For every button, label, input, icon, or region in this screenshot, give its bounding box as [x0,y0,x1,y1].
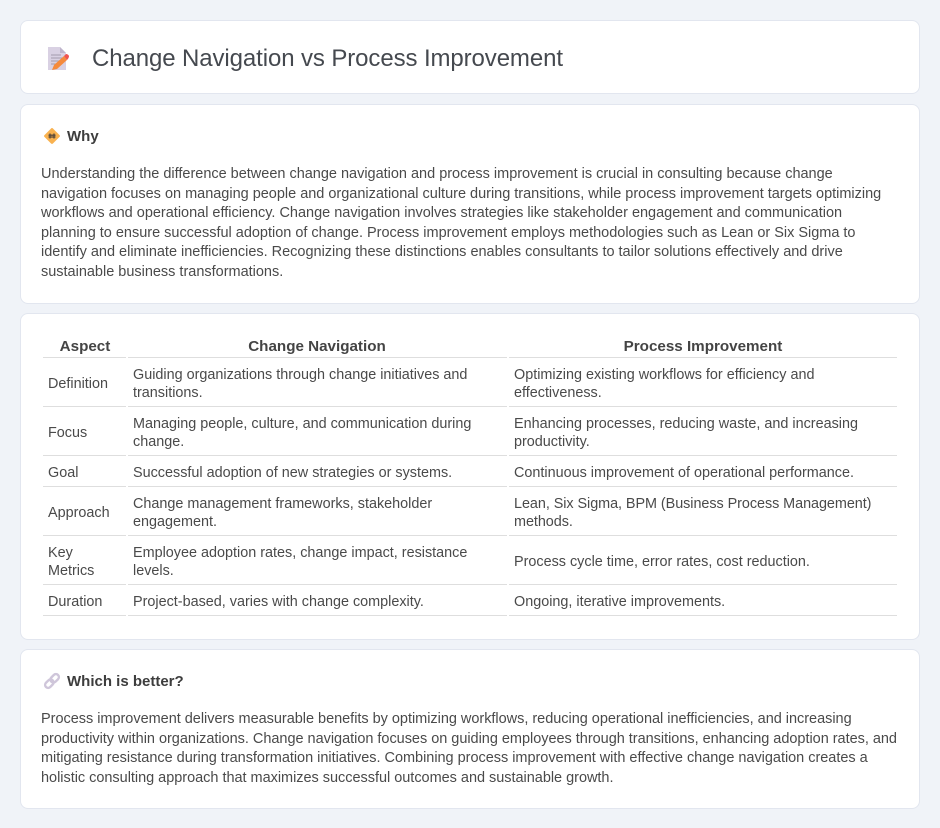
comparison table: Successful adoption of new strategies or systems. [133,465,452,481]
row: key metrics: Metrics [48,563,94,579]
row: approach: Approach [48,505,110,521]
text block: why: identify and eliminate inefficiencies. Recognizing these distinctions enables consultants to tailor solutions effectively and drive [41,244,843,260]
column header: change navigation: Change Navigation [248,338,386,355]
text block: why: workflows and operational efficiency. Change navigation involves strategies like stakeholder engagement and communication [41,205,842,221]
icon: warning diamond [44,128,60,144]
text block: which is better: Process improvement delivers measurable benefits by optimizing workflows, reducing operational inefficiencies, and increasing [41,711,852,727]
text block: why: navigation focuses on managing people and organizational culture during transitions, while process improvement targets optimizing [41,186,881,202]
row: focus: Focus [48,425,87,441]
row: duration: Duration [48,594,102,610]
comparison table: effectiveness. [514,385,602,401]
comparison table: transitions. [133,385,203,401]
comparison table: Managing people, culture, and communication during [133,416,471,432]
comparison table: Process cycle time, error rates, cost reduction. [514,554,810,570]
comparison table: levels. [133,563,174,579]
row: definition: Definition [48,376,108,392]
icon: chain link [44,672,60,690]
comparison table: engagement. [133,514,217,530]
text block: why: planning to ensure successful adoption of change. Process improvement employs methodologies such as Lean or Six Sigma to [41,225,855,241]
comparison table: Guiding organizations through change initiatives and [133,367,467,383]
heading: why: Why [67,128,99,145]
text block: why [41,166,881,280]
text block: which is better: mitigating resistance during transformation initiatives. Combining process improvement with effective change navigation creates a [41,750,868,766]
comparison table: Employee adoption rates, change impact, resistance [133,545,467,561]
comparison table: Ongoing, iterative improvements. [514,594,725,610]
text block: which is better [41,711,897,786]
comparison table: Project-based, varies with change complexity. [133,594,424,610]
comparison table: Change management frameworks, stakeholder [133,496,432,512]
comparison table [43,338,897,616]
comparison table: Continuous improvement of operational performance. [514,465,854,481]
comparison table: methods. [514,514,573,530]
comparison table: productivity. [514,434,590,450]
comparison table: Lean, Six Sigma, BPM (Business Process Management) [514,496,871,512]
icon: document with pencil [48,47,69,70]
text block: why: Understanding the difference between change navigation and process improvement is crucial in consulting because change [41,166,833,182]
comparison table: Enhancing processes, reducing waste, and increasing [514,416,858,432]
heading: which is better: Which is better? [67,673,184,690]
title: Change Navigation vs Process Improvement [92,45,563,72]
panel: which is better card [20,649,920,809]
comparison table: Optimizing existing workflows for efficiency and [514,367,814,383]
column header: process improvement: Process Improvement [624,338,782,355]
panel: comparison table card [20,313,920,640]
text block: why: sustainable business transformations. [41,264,283,280]
panel: why card [20,104,920,304]
row: key metrics [48,545,94,579]
text block: which is better: productivity within organizations. Change navigation focuses on guiding employees through transitions, enhancing adoption rates, and [41,731,897,747]
comparison table: change. [133,434,184,450]
row: goal: Goal [48,465,78,481]
text block: which is better: holistic consulting approach that maximizes successful outcomes and sustainable growth. [41,770,613,786]
column header: aspect: Aspect [60,338,110,355]
panel: title card [20,20,920,94]
row: key metrics: Key [48,545,73,561]
